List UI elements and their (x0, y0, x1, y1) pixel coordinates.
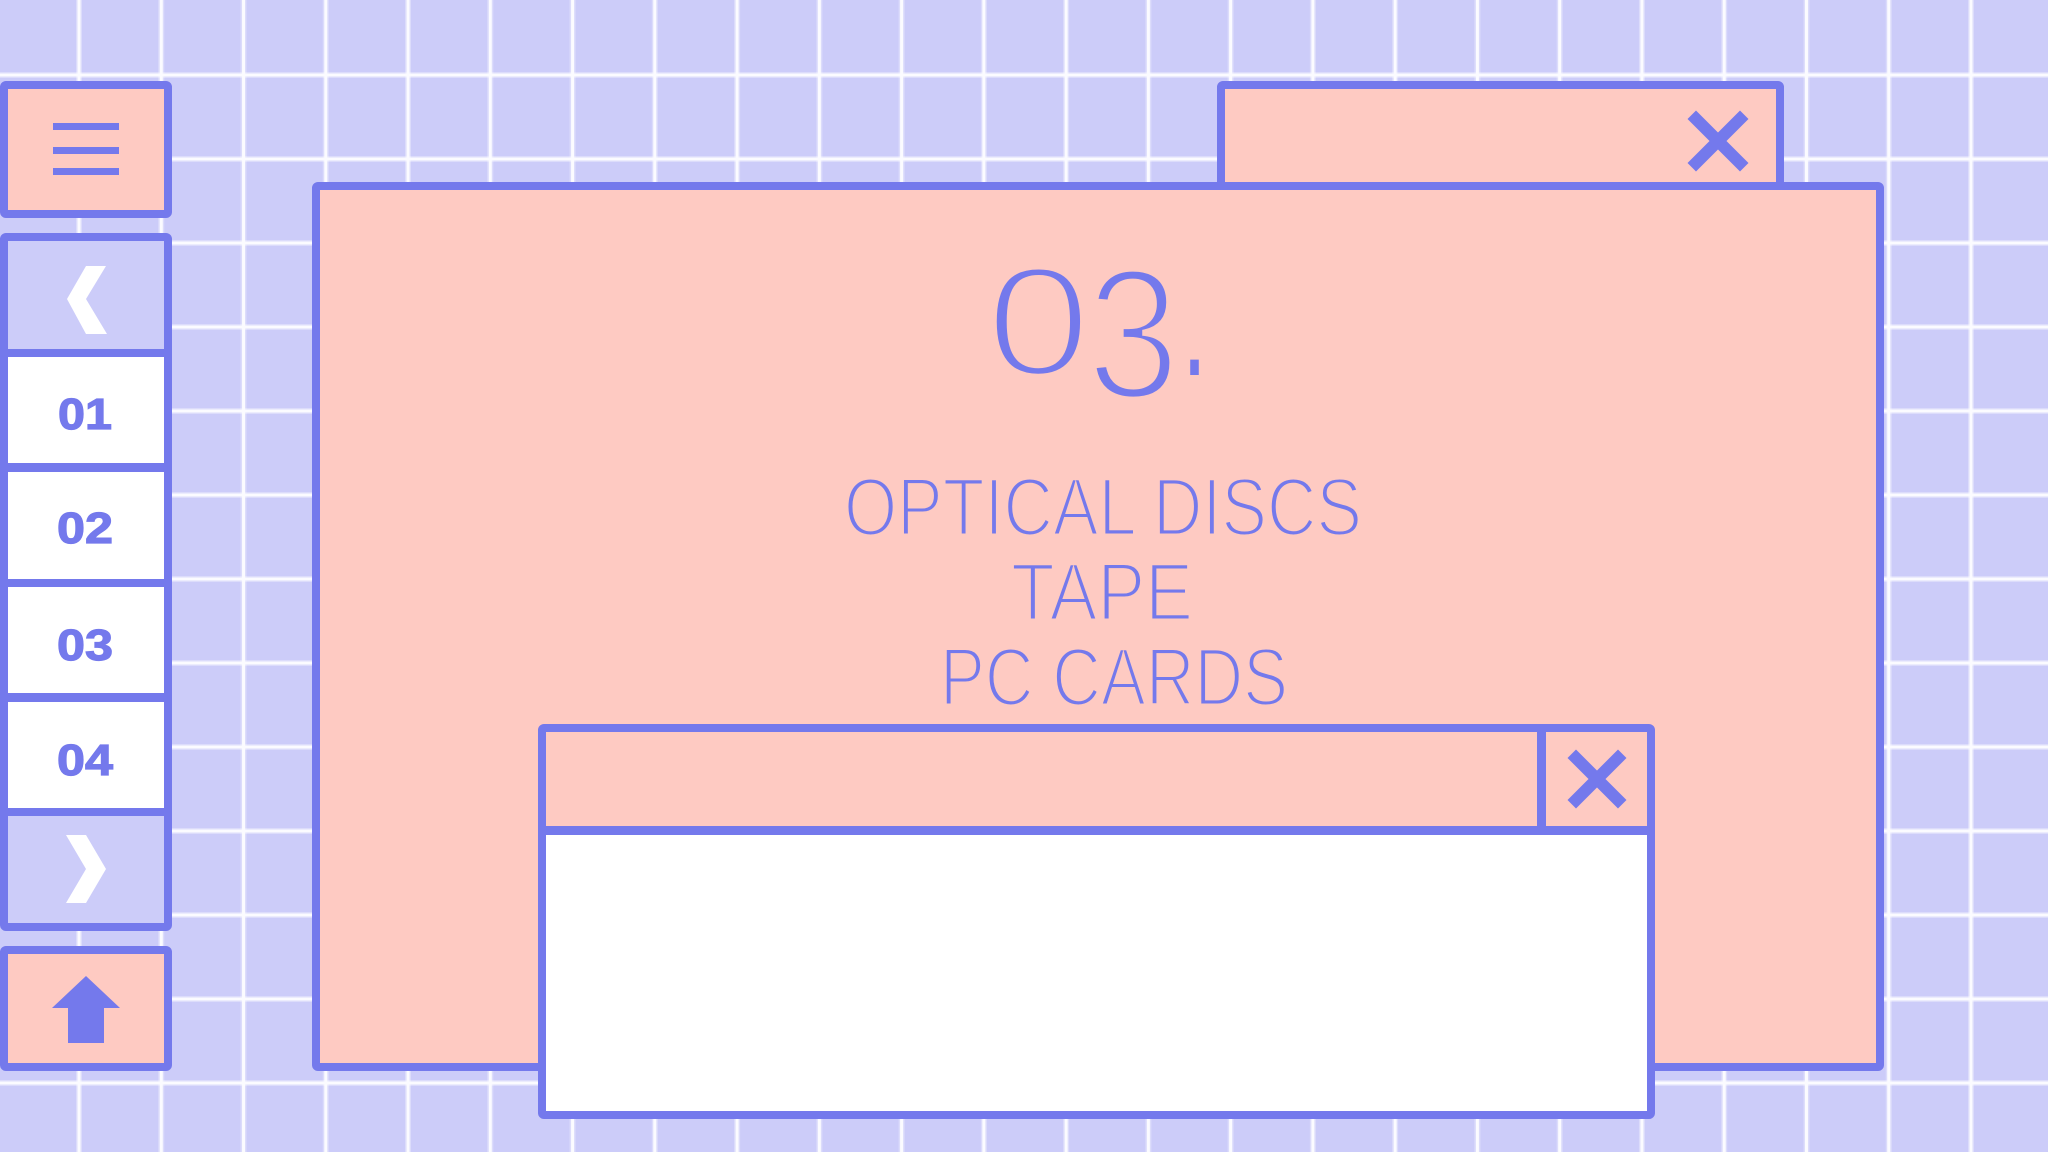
nav item 04 (8, 693, 164, 816)
panel: menu button (4, 85, 168, 214)
panel: front window (542, 728, 1651, 1115)
window title bar (546, 732, 1647, 835)
panel: page navigation (4, 237, 168, 927)
icon: close X (1576, 758, 1618, 800)
nav item 03: 03 (57, 621, 113, 670)
panel: main window (316, 186, 1880, 1067)
section number: 3 (1087, 231, 1180, 438)
section number: . (1182, 245, 1207, 406)
panel: rear window (1221, 85, 1780, 205)
nav item 01: 01 (58, 390, 112, 439)
section number (986, 231, 1207, 438)
nav item 02 (8, 463, 164, 587)
section number: 0 (986, 235, 1091, 408)
nav item 02: 02 (57, 504, 113, 553)
topic list: OPTICAL DISCS (844, 462, 1362, 553)
nav item 04: 04 (57, 736, 114, 785)
topic list (844, 462, 1362, 723)
icon: hamburger menu (53, 123, 119, 175)
icon: up arrow (52, 976, 120, 1043)
topic list: TAPE (1011, 547, 1193, 638)
icon: next chevron (66, 835, 106, 903)
nav item 03 (8, 579, 164, 702)
panel: back to top button (4, 950, 168, 1067)
icon: close X (1696, 119, 1740, 163)
topic list: PC CARDS (940, 632, 1288, 723)
icon: previous chevron (67, 266, 107, 334)
nav item 01 (8, 349, 164, 471)
